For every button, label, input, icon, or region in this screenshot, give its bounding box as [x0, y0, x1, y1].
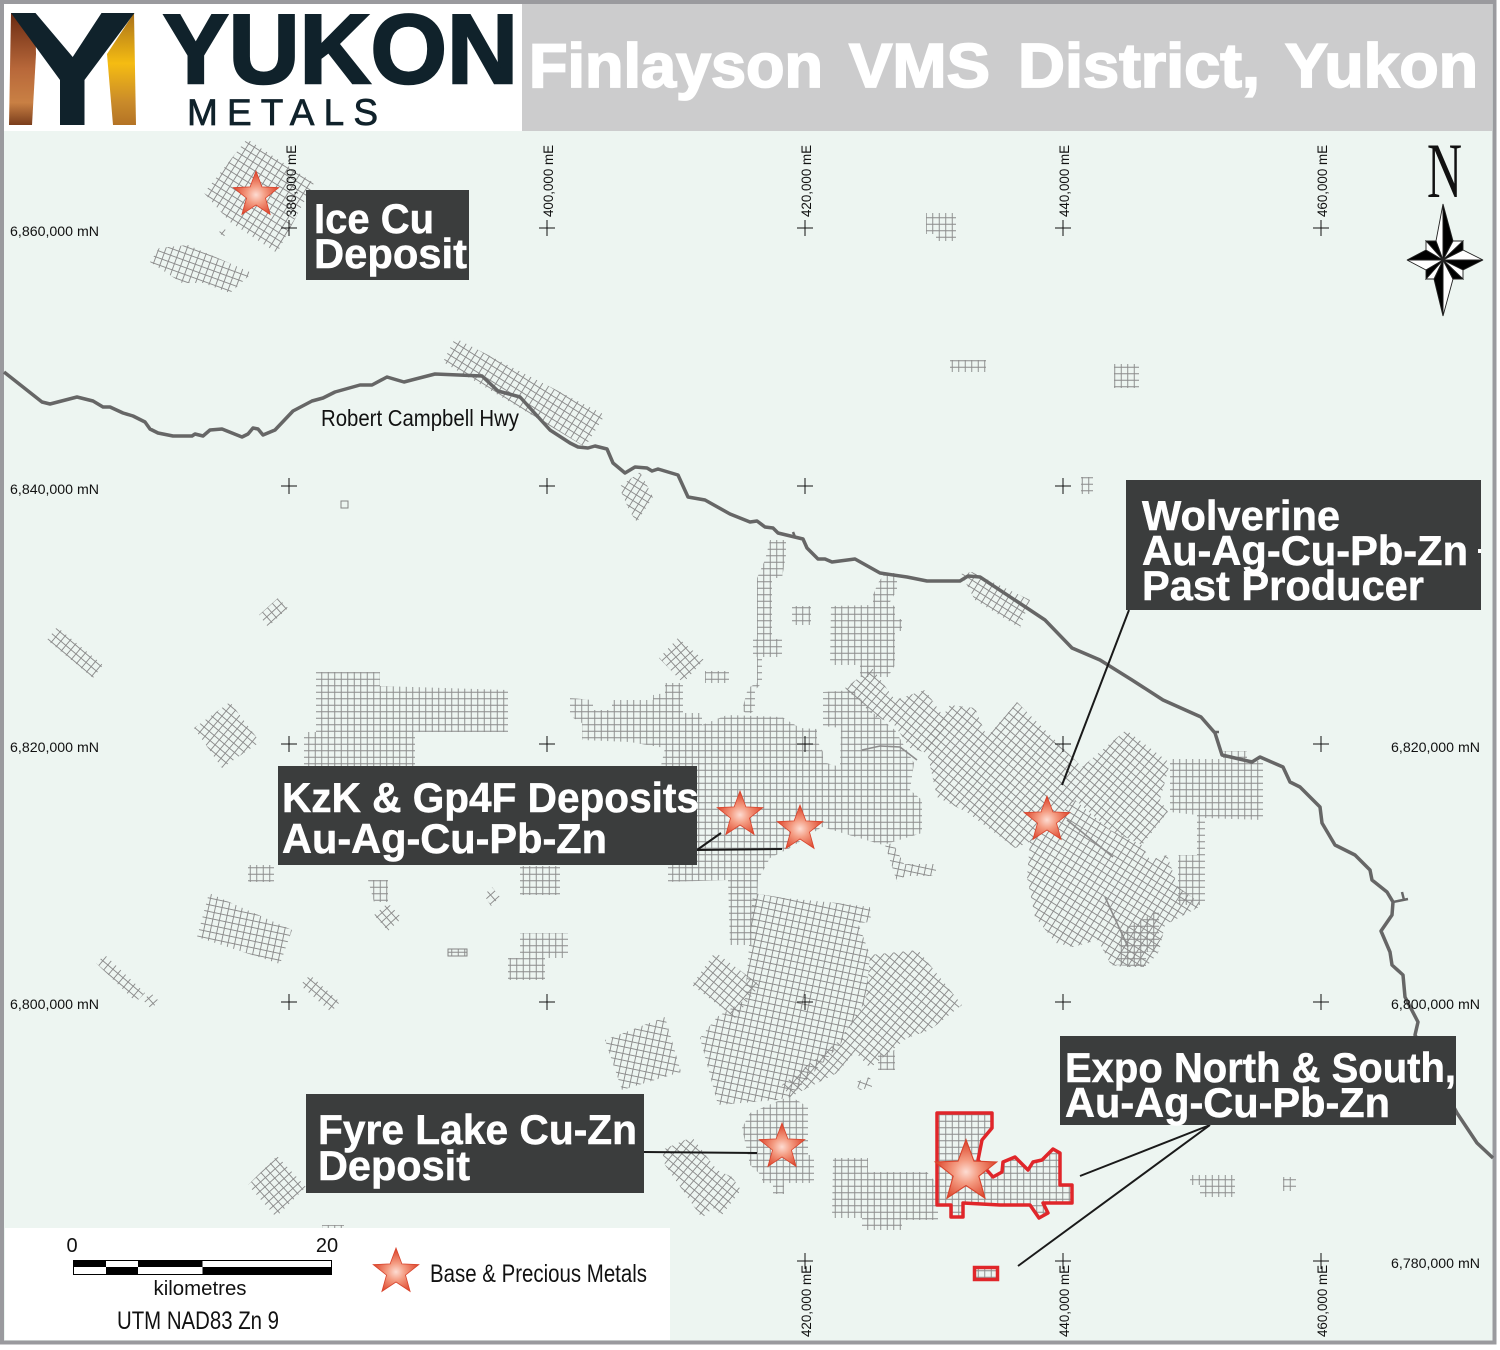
- legend star: [373, 1248, 419, 1291]
- north arrow: N: [1427, 127, 1462, 214]
- scale bar: 0: [66, 1235, 78, 1257]
- northing labels: 6,800,000 mN: [1391, 996, 1480, 1012]
- scale bar: [66, 1235, 338, 1300]
- label: Expo North and South: [1060, 1036, 1456, 1126]
- header: title bar: District,: [1018, 32, 1260, 101]
- label: KzK and Gp4F: KzK & Gp4F Deposits: [282, 774, 699, 821]
- legend star text: Base & Precious Metals: [430, 1260, 647, 1288]
- Expo south small block: [974, 1268, 998, 1280]
- header: logo panel: [4, 0, 522, 133]
- claims: Ice Cu area: [150, 139, 314, 293]
- label: Wolverine: Wolverine: [1142, 492, 1340, 539]
- label: KzK and Gp4F: [278, 766, 699, 865]
- highway: [4, 372, 1493, 1158]
- logo subtitle: METALS: [187, 92, 378, 133]
- label: Expo North and South: Expo North & South,: [1065, 1044, 1456, 1091]
- claims: southern mass: [662, 893, 962, 1230]
- claims: central western mass: [194, 540, 948, 945]
- header: title bar: VMS: [849, 32, 990, 101]
- easting labels: 460,000 mE: [1314, 1265, 1330, 1337]
- northing labels: 6,860,000 mN: [10, 223, 99, 239]
- claims: northern scattered blocks: [47, 213, 1139, 678]
- easting labels: 460,000 mE: [1314, 145, 1330, 217]
- northing labels: 6,820,000 mN: [10, 739, 99, 755]
- highway spurs: [793, 532, 1408, 902]
- easting labels: 420,000 mE: [798, 145, 814, 217]
- icon: Yukon Metals Y-M mark: [9, 13, 136, 125]
- claims: south-western scattered blocks: [96, 865, 681, 1229]
- northing labels: 6,820,000 mN: [1391, 739, 1480, 755]
- easting labels: [283, 145, 1330, 1337]
- label: Wolverine: [1126, 480, 1481, 610]
- header: title bar: Finlayson: [529, 32, 823, 101]
- scale bar: 20: [316, 1235, 338, 1257]
- easting labels: 440,000 mE: [1056, 145, 1072, 217]
- easting labels: 380,000 mE: [283, 145, 299, 217]
- north arrow: [1407, 127, 1483, 316]
- header: title bar: [522, 4, 1492, 131]
- legend panel: [5, 1228, 670, 1340]
- projection note: UTM NAD83 Zn 9: [117, 1307, 279, 1335]
- Expo property outline: [937, 1113, 1072, 1280]
- northing labels: 6,780,000 mN: [1391, 1255, 1480, 1271]
- leader lines: [644, 610, 1210, 1266]
- compass rose: [1407, 204, 1483, 316]
- label: Fyre Lake: Deposit: [318, 1142, 470, 1189]
- label: Ice Cu Deposit: [306, 190, 469, 280]
- label: Expo North and South: Au-Ag-Cu-Pb-Zn: [1065, 1079, 1390, 1126]
- survey grid crosses: [281, 220, 1329, 1269]
- label: Wolverine: Au-Ag-Cu-Pb-Zn: [1142, 527, 1468, 574]
- claims: eastern small blocks: [1190, 1175, 1296, 1197]
- northing labels: [10, 223, 1480, 1271]
- mineral claim blocks: [47, 139, 1296, 1230]
- header: title bar: Yukon: [1285, 32, 1478, 101]
- easting labels: 420,000 mE: [798, 1265, 814, 1337]
- northing labels: 6,840,000 mN: [10, 481, 99, 497]
- label: KzK and Gp4F: Au-Ag-Cu-Pb-Zn: [282, 815, 607, 862]
- deposit stars: [233, 171, 1070, 1198]
- easting labels: 440,000 mE: [1056, 1265, 1072, 1337]
- easting labels: 400,000 mE: [540, 145, 556, 217]
- road label: Robert Campbell Hwy: [321, 405, 519, 431]
- label: Ice Cu Deposit: Deposit: [314, 230, 467, 277]
- claims: Wolverine mass: [862, 572, 1263, 967]
- label: Wolverine: Past Producer: [1142, 562, 1424, 609]
- label: Ice Cu Deposit: Ice Cu: [314, 195, 434, 242]
- label: Fyre Lake: Fyre Lake Cu-Zn: [318, 1106, 637, 1153]
- scale bar: kilometres: [154, 1278, 246, 1300]
- label: Fyre Lake: [306, 1094, 644, 1193]
- northing labels: 6,800,000 mN: [10, 996, 99, 1012]
